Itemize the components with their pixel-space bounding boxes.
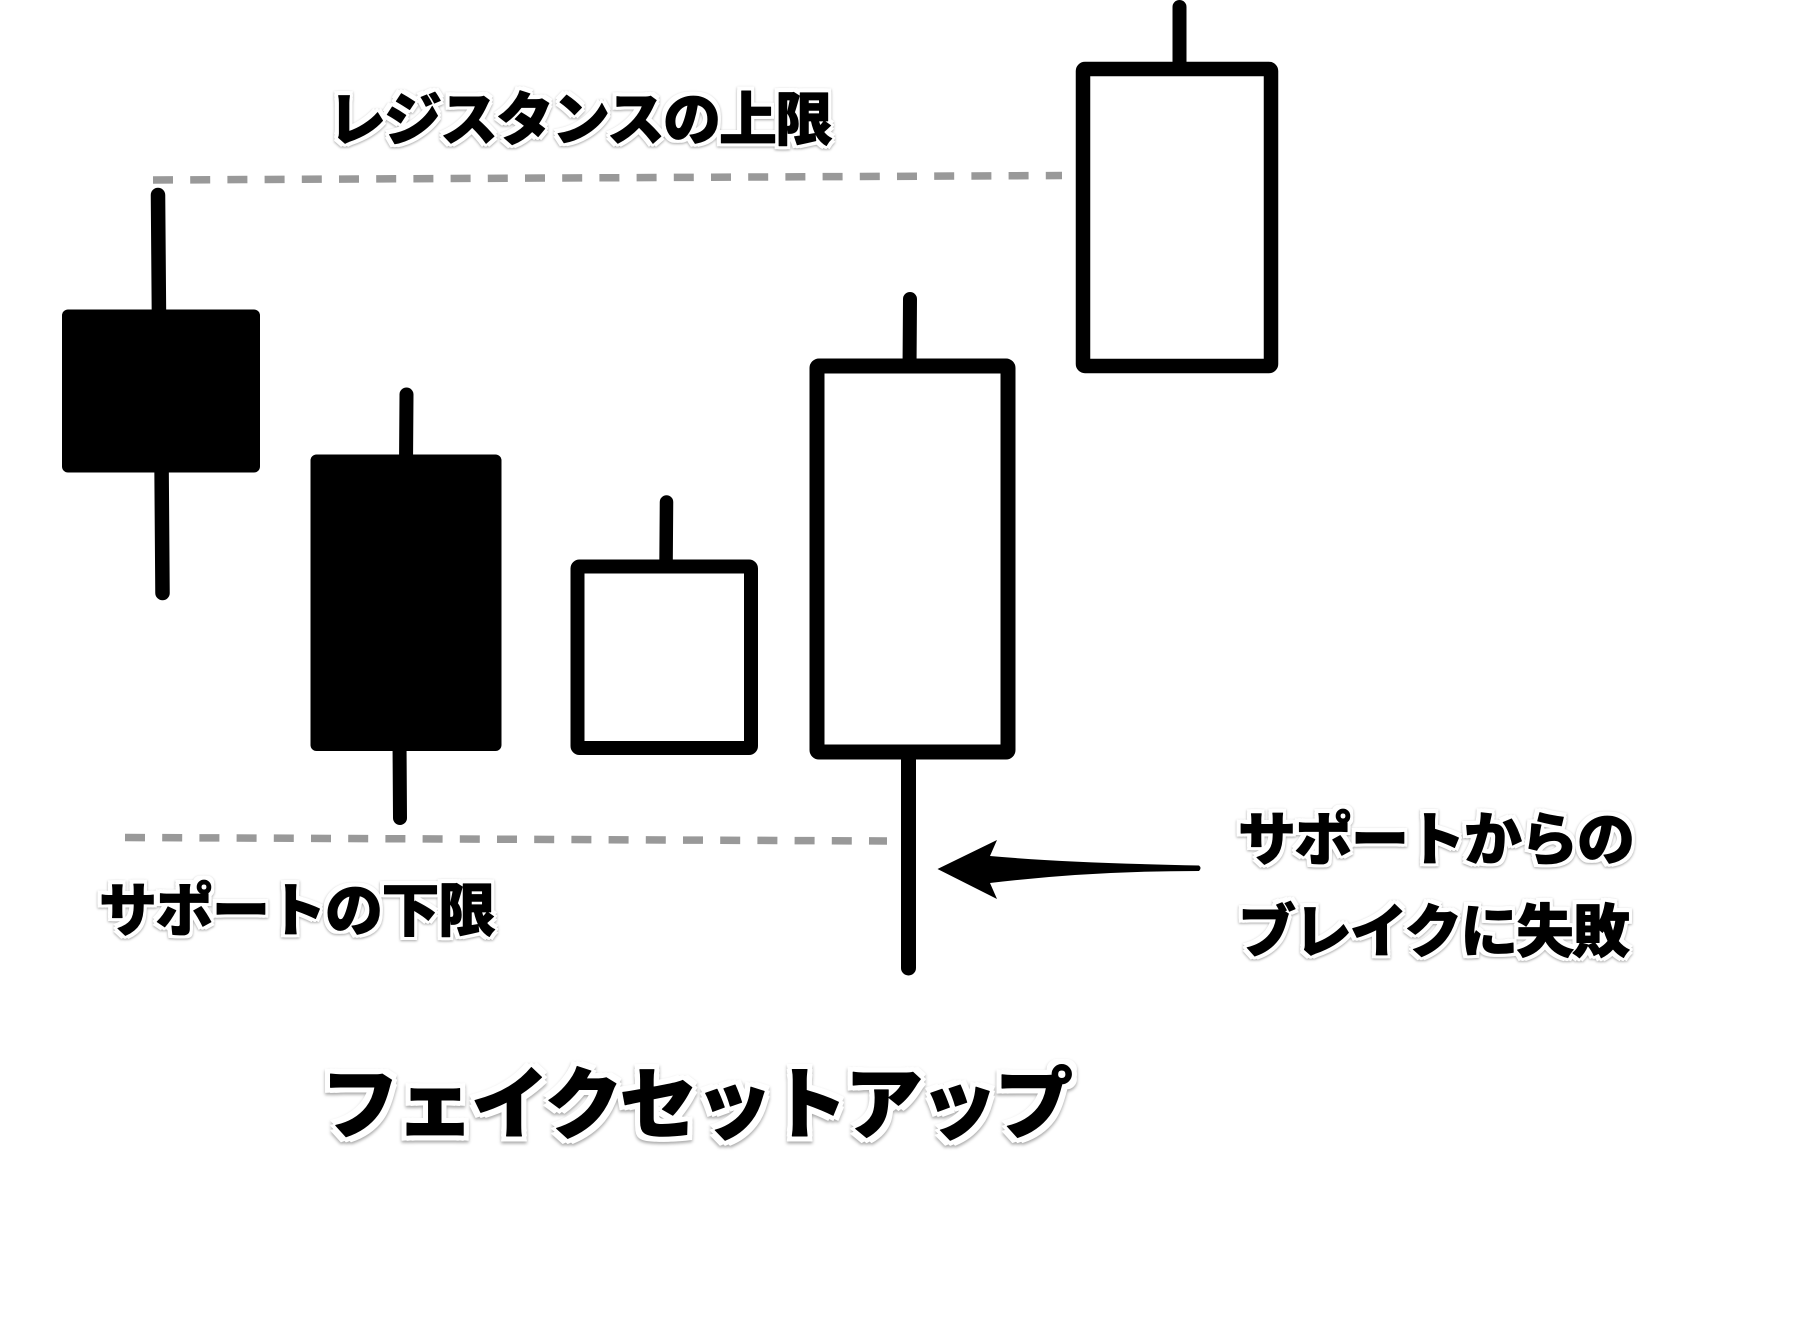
arrow: pointing at lower wick <box>938 840 1200 899</box>
label: support lower limit: サポートの下限 <box>99 879 496 944</box>
candle 5: white, above resistance <box>1083 7 1271 366</box>
callout: failed break of support <box>1238 808 1635 965</box>
callout: failed break of support: ブレイクに失敗 <box>1238 900 1630 965</box>
candle 1: black <box>62 195 260 593</box>
label: resistance upper limit: レジスタンスの上限 <box>328 88 833 153</box>
candle 3: white <box>578 502 751 748</box>
candle 2: black <box>310 394 502 818</box>
callout: failed break of support: サポートからの <box>1238 808 1635 873</box>
dashed line: support lower limit <box>125 838 887 841</box>
title: フェイクセットアップ <box>321 1061 1073 1149</box>
candle 4: white with long lower wick <box>817 299 1008 968</box>
dashed line: resistance upper limit <box>153 176 1062 180</box>
